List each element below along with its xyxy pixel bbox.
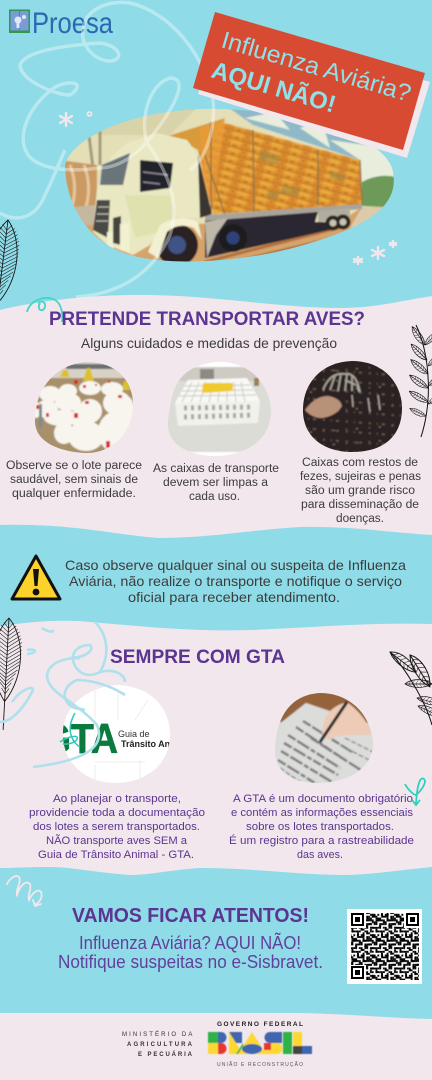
logo: ministério: AGRICULTURA (127, 1042, 193, 1048)
text: Proesa: Proesa (32, 7, 113, 40)
photo: GTA logo (62, 685, 170, 783)
grille (93, 200, 110, 238)
text: a GTA é um documento: A GTA é um documento obrigatório (233, 793, 413, 805)
leaf: top left (0, 218, 22, 333)
text: ao planejar: Guia de Trânsito Animal - GTA. (38, 849, 194, 861)
squiggle: teal on GTA logo (60, 713, 80, 747)
panel: pretende transportar aves background (0, 295, 432, 538)
ground (85, 208, 361, 262)
text: a GTA é um documento: das aves. (297, 849, 343, 861)
green trees (362, 176, 400, 208)
leaf: right upper (407, 325, 432, 437)
text: warning: oficial para receber atendimento. (128, 589, 340, 605)
photo: dirty litter (302, 361, 402, 452)
decorative swirl: GTA (0, 622, 125, 767)
text: observe o lote: Observe se o lote parece (6, 460, 142, 472)
text: ao planejar: Ao planejar o transporte, (53, 793, 181, 805)
leaf: mid left (0, 617, 23, 731)
squiggle: teal right (405, 778, 425, 805)
banner line 2: AQUI NÃO! (208, 56, 339, 118)
text: caixas com restos: para disseminação de (301, 499, 419, 511)
logo: Proesa (9, 7, 113, 40)
banner red shape (193, 12, 425, 150)
label: união e reconstrução: UNIÃO E RECONSTRUÇÃO (217, 1061, 303, 1068)
text: caixas com restos: doenças. (336, 513, 384, 525)
logo: ministério: MINISTÉRIO DA (122, 1031, 192, 1038)
photo: GTA logo: GTA (42, 715, 118, 762)
text: caixas com restos: fezes, sujeiras e penas (300, 471, 421, 483)
leaf: mid right (387, 648, 432, 725)
logo: governo federal brasil (208, 1021, 312, 1068)
photo: truck (65, 108, 394, 262)
banner line 1: Influenza Aviária? (218, 27, 414, 107)
photo: chickens (34, 362, 133, 453)
stars: near truck left (60, 112, 92, 126)
text: warning: Aviária, não realize o transporte e notifique o serviço (69, 573, 402, 589)
banner: Influenza Aviária? AQUI NÃO! (193, 12, 430, 158)
text: a GTA é um documento: e contém as informações essenciais (231, 807, 414, 819)
photo: GTA logo: Trânsito Animal (121, 739, 188, 749)
text: a GTA é um documento: sobre os lotes transportados. (246, 821, 394, 833)
heading: vamos ficar atentos: VAMOS FICAR ATENTOS! (72, 905, 309, 927)
text: caixas com restos: Caixas com restos de (302, 457, 418, 469)
text: warning: Caso observe qualquer sinal ou suspeita de Influenza (65, 557, 406, 573)
text: call to action: Influenza Aviária? AQUI NÃO! (79, 932, 301, 953)
photo: GTA logo: Guia de (118, 729, 150, 739)
text: call to action: Notifique suspeitas no e-Sisbravet. (58, 952, 323, 972)
photo: transport crate (165, 362, 275, 456)
squiggle: teal top (27, 298, 62, 322)
panel: sempre com GTA background (0, 621, 432, 875)
chassis (205, 204, 362, 222)
QR code (347, 909, 422, 984)
text: caixas limpas: devem ser limpas a (163, 477, 269, 489)
cargo (198, 123, 362, 214)
text: caixas limpas: cada uso. (189, 491, 240, 503)
wheels (158, 224, 199, 262)
text: observe o lote: qualquer enfermidade. (12, 488, 136, 500)
banner shadow (198, 20, 430, 158)
text: ao planejar: dos lotes a serem transportados. (33, 821, 200, 833)
text: caixas com restos: são um grande risco (305, 485, 415, 497)
squiggle: white arrow (7, 876, 42, 906)
cab (93, 133, 200, 255)
decorative swirl: top (0, 2, 213, 297)
photo: filling document (275, 693, 373, 783)
logo: ministério: E PECUÁRIA (138, 1051, 193, 1058)
stars: near truck right (354, 241, 396, 264)
icon: warning triangle (12, 556, 60, 599)
text: ao planejar: providencie toda a documentação (29, 807, 205, 819)
label: governo federal: GOVERNO FEDERAL (217, 1021, 303, 1028)
text: caixas limpas: As caixas de transporte (153, 463, 279, 475)
heading: sempre com GTA: SEMPRE COM GTA (110, 647, 285, 668)
text: ao planejar: NÃO transporte aves SEM a (46, 834, 188, 847)
heading: pretende transportar aves: PRETENDE TRANSPORTAR AVES? (49, 309, 365, 330)
hay bales (65, 160, 98, 208)
logo shapes: BRASIL (208, 1032, 312, 1054)
windows (140, 160, 173, 192)
text: observe o lote: saudável, sem sinais de (10, 474, 138, 486)
icon: Proesa book (9, 10, 30, 33)
subheading: Alguns cuidados e medidas de prevenção (81, 335, 337, 351)
panel: footer background (0, 1013, 432, 1080)
text: a GTA é um documento: É um registro para a rastreabilidade (229, 834, 414, 847)
